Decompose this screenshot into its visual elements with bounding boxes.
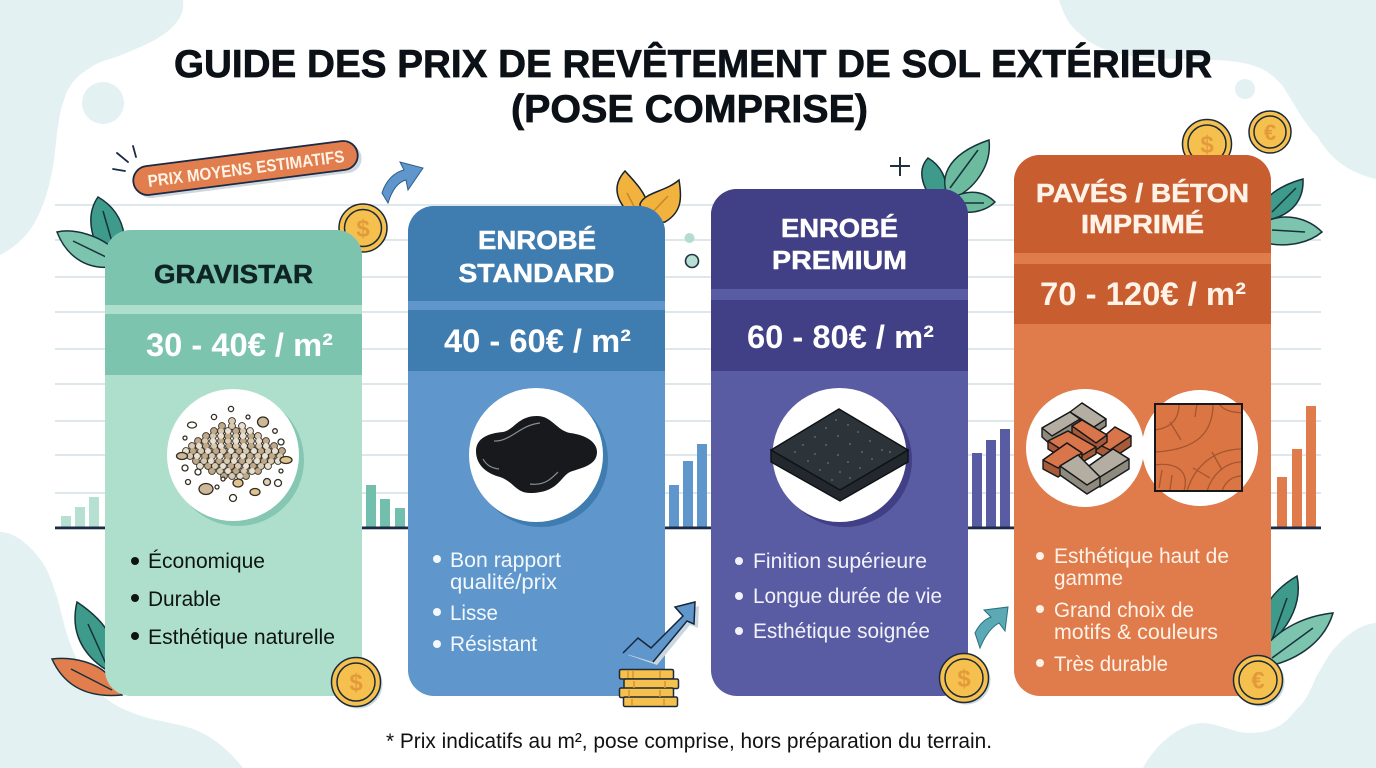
heading: pavés / béton imprimé: IMPRIMÉ: [1081, 209, 1204, 239]
heading: enrobé standard: [408, 206, 665, 301]
panel: pavés / béton imprimé: [1014, 155, 1271, 696]
icon: curved arrow blue: [382, 162, 423, 203]
panel: enrobé premium: [711, 189, 968, 696]
list: enrobé standard points: Résistant: [450, 633, 537, 656]
icon: coin euro bottom: [1234, 656, 1284, 706]
icon: curved arrow teal: [975, 607, 1008, 648]
icon: coin euro top: €: [1264, 120, 1276, 145]
list: pavés / béton imprimé points: Très durable: [1054, 653, 1168, 676]
heading: enrobé premium: [711, 189, 968, 289]
list: pavés / béton imprimé points: gamme: [1054, 567, 1123, 590]
chart grid lines: [55, 205, 1321, 493]
list: enrobé premium points: Finition supérieure: [753, 550, 927, 573]
icon: yellow leaves: [617, 171, 681, 223]
icon: coin euro top: [1249, 111, 1291, 153]
decorative dots: [684, 233, 698, 268]
icon: coin bottom of gravistar card: [332, 658, 382, 708]
icon: premium asphalt slab: [771, 388, 912, 527]
list: enrobé standard points: [433, 549, 561, 656]
bar chart: blue: [669, 444, 707, 528]
heading: gravistar: [105, 230, 362, 305]
icon: paving stones: [1026, 389, 1144, 507]
icon: leaves bottom-left of gravistar card: [52, 602, 122, 696]
chart baseline: [55, 526, 1321, 529]
list: enrobé standard points: Bon rapport: [450, 549, 561, 572]
icon: stamped concrete: [1142, 390, 1258, 506]
badge: prix moyens estimatifs: [113, 139, 363, 200]
price: enrobé standard: [408, 310, 665, 371]
title: (POSE COMPRISE): [511, 88, 868, 131]
heading: enrobé standard: ENROBÉ: [478, 225, 596, 255]
list: enrobé premium points: Longue durée de vie: [753, 585, 942, 608]
heading: pavés / béton imprimé: PAVÉS / BÉTON: [1036, 178, 1249, 208]
price: pavés / béton imprimé: 70 - 120€ / m²: [1040, 276, 1246, 312]
price: gravistar: [105, 314, 362, 375]
list: gravistar points: Durable: [148, 588, 221, 611]
bar chart: teal: [366, 485, 405, 528]
list: gravistar points: [131, 550, 335, 649]
icon: leaves top-left of gravistar card: [57, 197, 124, 268]
icon: asphalt blob: [469, 388, 608, 527]
icon: coin dollar top: [1182, 120, 1232, 168]
list: pavés / béton imprimé points: Grand choix de: [1054, 599, 1194, 622]
price: pavés / béton imprimé: [1014, 264, 1271, 324]
bar chart: green rising: [61, 497, 99, 528]
list: enrobé premium points: Esthétique soignée: [753, 620, 930, 643]
icon: leaves bottom right of paving card: [1262, 576, 1333, 667]
icon: coin dollar top: $: [1200, 132, 1214, 158]
heading: pavés / béton imprimé: [1014, 155, 1271, 253]
badge: prix moyens estimatifs: PRIX MOYENS ESTIMATIFS: [147, 147, 346, 191]
icon: gravel pile: [167, 389, 304, 526]
heading: enrobé standard: STANDARD: [458, 258, 614, 288]
list: enrobé premium points: [735, 550, 942, 643]
list: enrobé standard points: qualité/prix: [450, 571, 558, 594]
price: gravistar: 30 - 40€ / m²: [146, 327, 333, 363]
panel: gravistar: [105, 230, 362, 696]
bar chart: purple: [972, 429, 1010, 528]
icon: leaves top right of paving card: [1262, 179, 1322, 245]
heading: enrobé premium: PREMIUM: [772, 245, 907, 275]
list: pavés / béton imprimé points: Esthétique haut de: [1054, 545, 1229, 568]
list: pavés / béton imprimé points: [1036, 545, 1229, 676]
title: GUIDE DES PRIX DE REVÊTEMENT DE SOL EXTÉRIEUR: [174, 42, 1212, 86]
heading: enrobé premium: ENROBÉ: [781, 213, 898, 243]
icon: coin bottom of premium card: [940, 654, 990, 704]
icon: rising trend arrow: [623, 602, 699, 665]
list: pavés / béton imprimé points: motifs & couleurs: [1054, 621, 1218, 644]
icon: coin behind gravistar card: [339, 204, 387, 252]
icon: coin bottom of gravistar card: $: [349, 670, 363, 696]
heading: gravistar: GRAVISTAR: [154, 259, 313, 289]
list: enrobé standard points: Lisse: [450, 602, 498, 625]
icon: coin stack: [620, 670, 678, 706]
icon: coin bottom of premium card: $: [957, 666, 971, 692]
price: enrobé premium: 60 - 80€ / m²: [747, 319, 934, 355]
list: gravistar points: Esthétique naturelle: [148, 626, 335, 649]
list: gravistar points: Économique: [148, 550, 265, 573]
plus mark: [890, 157, 910, 176]
price: enrobé premium: [711, 300, 968, 371]
panel: enrobé standard: [408, 206, 665, 696]
price: enrobé standard: 40 - 60€ / m²: [444, 323, 631, 359]
footnote: * Prix indicatifs au m², pose comprise, hors préparation du terrain.: [386, 730, 992, 753]
icon: green leaves top of premium card: [922, 140, 995, 212]
icon: coin behind gravistar card: $: [356, 216, 370, 242]
icon: coin euro bottom: €: [1251, 668, 1265, 694]
bar chart: orange: [1277, 406, 1316, 528]
title: [174, 42, 1212, 131]
